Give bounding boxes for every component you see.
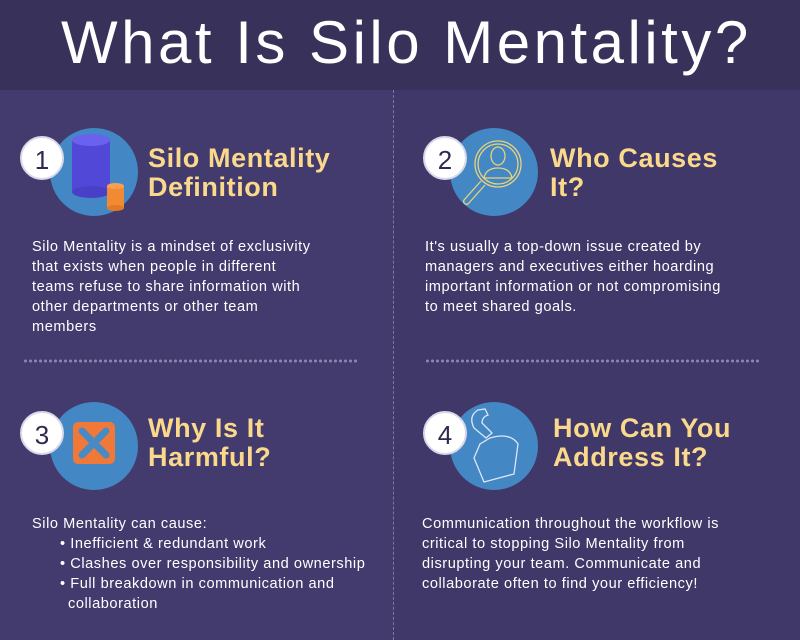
text 3: • Inefficient & redundant work xyxy=(60,536,266,552)
text 1: Silo Mentality is a mindset of exclusivity xyxy=(32,239,311,255)
text 2: It's usually a top-down issue created by xyxy=(425,239,701,255)
text 1: other departments or other team xyxy=(32,299,258,315)
text 3: collaboration xyxy=(68,596,158,612)
text 1: teams refuse to share information with xyxy=(32,279,300,295)
number 4: 4 xyxy=(438,420,452,450)
number 3: 3 xyxy=(35,420,49,450)
text 4 xyxy=(422,516,719,592)
text 3: • Clashes over responsibility and ownership xyxy=(60,556,365,572)
text 1 xyxy=(32,239,311,335)
title: What Is Silo Mentality? xyxy=(61,9,752,76)
panel 3 xyxy=(20,402,365,612)
heading 3: Why Is It xyxy=(148,413,264,443)
number 1 xyxy=(20,136,64,180)
panel 1 xyxy=(20,128,330,335)
title bar xyxy=(0,0,800,90)
icon: silo cylinders xyxy=(50,128,138,216)
heading 2 xyxy=(550,143,718,202)
text 1: that exists when people in different xyxy=(32,259,276,275)
text 2: managers and executives either hoarding xyxy=(425,259,714,275)
panel 2 xyxy=(423,128,721,315)
number 3 xyxy=(20,411,64,455)
text 4: collaborate often to find your efficiency! xyxy=(422,576,698,592)
heading 3 xyxy=(148,413,271,472)
right background half xyxy=(394,90,800,640)
heading 1 xyxy=(148,143,330,202)
number 2 xyxy=(423,136,467,180)
heading 4: Address It? xyxy=(553,442,708,472)
text 2 xyxy=(425,239,721,315)
vertical divider xyxy=(393,90,394,640)
text 4: disrupting your team. Communicate and xyxy=(422,556,701,572)
text 3 xyxy=(32,516,365,612)
text 4: Communication throughout the workflow is xyxy=(422,516,719,532)
number 1: 1 xyxy=(35,145,49,175)
heading 4: How Can You xyxy=(553,413,731,443)
text 3: • Full breakdown in communication and xyxy=(60,576,334,592)
text 4: critical to stopping Silo Mentality from xyxy=(422,536,685,552)
heading 3: Harmful? xyxy=(148,442,271,472)
icon: magnifier person xyxy=(450,128,538,216)
heading 4 xyxy=(553,413,731,472)
number 2: 2 xyxy=(438,145,452,175)
heading 2: Who Causes xyxy=(550,143,718,173)
icon: x box xyxy=(50,402,138,490)
heading 1: Silo Mentality xyxy=(148,143,330,173)
panel 4 xyxy=(422,402,731,592)
text 2: to meet shared goals. xyxy=(425,299,577,315)
heading 2: It? xyxy=(550,172,585,202)
text 2: important information or not compromising xyxy=(425,279,721,295)
heading 1: Definition xyxy=(148,172,278,202)
number 4 xyxy=(423,411,467,455)
text 1: members xyxy=(32,319,97,335)
icon: hand with wrench xyxy=(450,402,538,490)
text 3: Silo Mentality can cause: xyxy=(32,516,207,532)
